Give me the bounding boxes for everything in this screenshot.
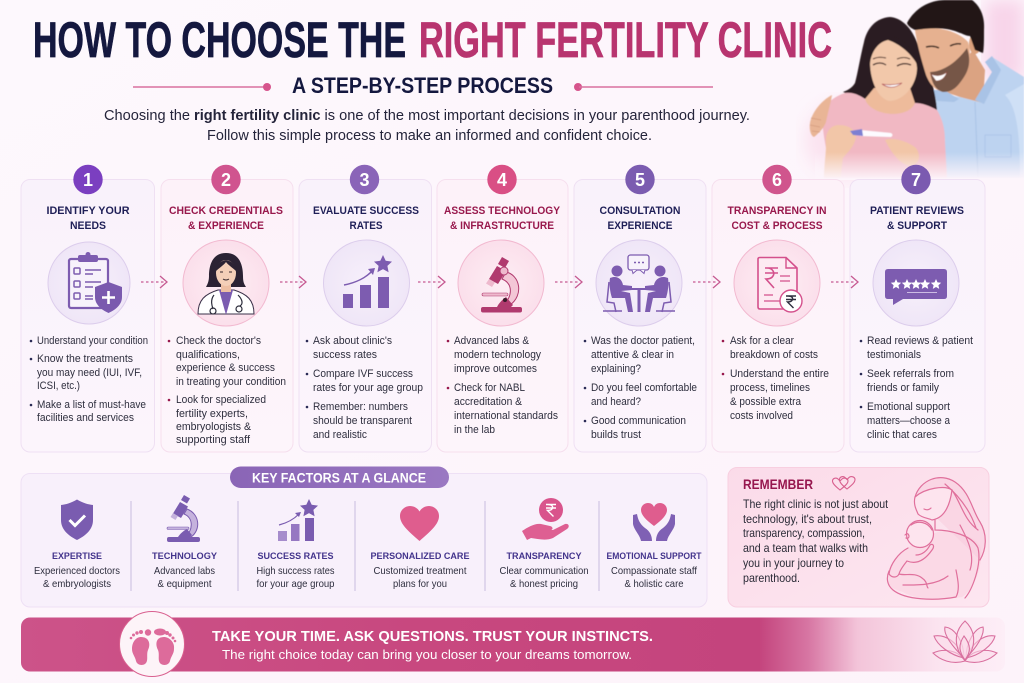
factor: personalized care: PERSONALIZED CARE xyxy=(370,551,470,562)
arrow 1 to 2 xyxy=(141,276,167,288)
panel: step 5 consultation experience xyxy=(574,165,706,452)
remember heading: REMEMBER xyxy=(743,476,813,492)
factor: emotional support xyxy=(606,503,702,590)
heading step 6 xyxy=(728,205,827,232)
step number 2 xyxy=(211,165,241,194)
bullets step 7: Read reviews & patient xyxy=(867,335,973,347)
bullets step 3: Ask about clinic's xyxy=(313,335,392,347)
remember text: technology, it's about trust, xyxy=(743,512,872,526)
bullets step 4: Check for NABL xyxy=(454,382,525,394)
bullets step 5: Good communication xyxy=(591,415,686,427)
icon: baby footprints xyxy=(120,612,184,676)
step number 3: 3 xyxy=(359,170,370,190)
factor: expertise: & embryologists xyxy=(43,578,111,590)
bullets step 1: ICSI, etc.) xyxy=(37,380,80,392)
woman face xyxy=(870,40,917,101)
heading step 5: CONSULTATION xyxy=(600,205,681,217)
heading step 6: TRANSPARENCY IN xyxy=(728,205,827,217)
bullets step 1: facilities and services xyxy=(37,412,134,424)
remember text: parenthood. xyxy=(743,571,800,585)
bullets step 7: friends or family xyxy=(867,382,939,394)
step number 6 xyxy=(762,165,792,194)
bullets step 1: Know the treatments xyxy=(37,353,133,365)
step number 3 xyxy=(350,165,379,194)
bullets step 3: and realistic xyxy=(313,429,367,441)
factor: transparency: & honest pricing xyxy=(510,578,578,590)
title: HOW TO CHOOSE THE xyxy=(33,12,406,68)
bullets step 7: testimonials xyxy=(867,349,921,361)
heading step 7: & SUPPORT xyxy=(887,220,947,232)
arrow 5 to 6 xyxy=(693,276,720,288)
factor: success rates: High success rates xyxy=(256,565,334,577)
factor: technology xyxy=(152,495,218,590)
bullets step 4: modern technology xyxy=(454,349,541,361)
icon: doctor xyxy=(183,240,269,326)
heading step 1 xyxy=(46,205,130,232)
factor: success rates: for your age group xyxy=(256,578,335,590)
factor: expertise: EXPERTISE xyxy=(52,551,102,562)
panel: key factors at a glance xyxy=(21,466,707,607)
step number 1 xyxy=(73,165,103,194)
panel: step 1 identify your needs xyxy=(21,165,154,452)
icon: microscope xyxy=(458,240,544,326)
remember text: you in your journey to xyxy=(743,556,844,570)
subtitle with ornament lines xyxy=(133,73,713,98)
bullets step 7: Emotional support xyxy=(867,401,950,413)
bullets step 7: matters—choose a xyxy=(867,415,951,427)
icon: rising bar chart with star xyxy=(324,240,410,326)
banner headline: TAKE YOUR TIME. ASK QUESTIONS. TRUST YOUR INSTINCTS. xyxy=(212,628,653,645)
step number 7: 7 xyxy=(911,170,921,190)
heading pill: KEY FACTORS AT A GLANCE xyxy=(252,470,426,486)
bullets step 6 xyxy=(722,335,829,422)
remember text xyxy=(743,497,889,585)
bullets step 5 xyxy=(584,335,697,441)
bullets step 4: accreditation & xyxy=(454,396,523,408)
icon: lotus xyxy=(933,621,997,662)
bullets step 2: qualifications, xyxy=(176,349,240,361)
arrow 3 to 4 xyxy=(418,276,445,288)
bullets step 4: improve outcomes xyxy=(454,363,537,375)
heading step 4 xyxy=(444,205,561,232)
bullets step 2: experience & success xyxy=(176,362,275,374)
factor: personalized care: plans for you xyxy=(393,578,447,590)
factor: emotional support: EMOTIONAL SUPPORT xyxy=(606,551,702,562)
bullets step 5: attentive & clear in xyxy=(591,349,674,361)
illustration: mother holding baby xyxy=(887,478,985,599)
woman hands xyxy=(824,125,856,178)
bullets step 2: in treating your condition xyxy=(176,376,286,388)
heading step 4: ASSESS TECHNOLOGY xyxy=(444,205,561,217)
intro text xyxy=(104,107,750,144)
heading step 6: COST & PROCESS xyxy=(732,220,822,232)
icon: two people at a table with speech bubble xyxy=(596,240,682,326)
factor: expertise xyxy=(34,500,120,590)
factor: transparency: TRANSPARENCY xyxy=(506,551,582,562)
heading step 5: EXPERIENCE xyxy=(608,220,672,232)
woman hair back xyxy=(843,17,937,110)
subtitle with ornament lines: A STEP-BY-STEP PROCESS xyxy=(292,73,553,98)
panel: step 4 assess technology xyxy=(437,165,568,452)
man hair xyxy=(907,0,984,53)
bullets step 4 xyxy=(447,335,558,436)
intro text: Choosing the right fertility clinic is one of the most important decisions in your parenthood journey. xyxy=(104,107,750,124)
bullets step 2: embryologists & xyxy=(176,421,252,433)
bullets step 6: process, timelines xyxy=(730,382,810,394)
title xyxy=(33,12,832,68)
intro text: Follow this simple process to make an informed and confident choice. xyxy=(207,127,652,144)
remember text: and a team that walks with xyxy=(743,541,868,555)
heading step 7 xyxy=(870,205,964,232)
bullets step 5: explaining? xyxy=(591,363,641,375)
sweater xyxy=(822,93,947,178)
man hand on shoulder xyxy=(810,95,832,137)
arrow 4 to 5 xyxy=(555,276,582,288)
bullets step 7: clinic that cares xyxy=(867,429,937,441)
footer banner xyxy=(21,612,1005,676)
factor: technology: Advanced labs xyxy=(154,565,215,577)
bullets step 1: Make a list of must-have xyxy=(37,399,146,411)
factor: emotional support: Compassionate staff xyxy=(611,565,697,577)
bullets step 4: Advanced labs & xyxy=(454,335,530,347)
bullets step 4: in the lab xyxy=(454,424,495,436)
heading step 2 xyxy=(169,205,283,232)
bullets step 5: builds trust xyxy=(591,429,641,441)
factor: success rates: SUCCESS RATES xyxy=(258,551,334,562)
panel: step 6 transparency in cost xyxy=(712,165,844,452)
bullets step 1: you may need (IUI, IVF, xyxy=(37,367,142,379)
step number 6: 6 xyxy=(772,170,782,190)
man shirt and neck are drawn first so the woman overlaps them xyxy=(933,57,1024,178)
remember text: transparency, compassion, xyxy=(743,526,865,540)
bullets step 7 xyxy=(860,335,973,441)
step number 5 xyxy=(625,165,655,194)
arrow 6 to 7 xyxy=(831,276,858,288)
pregnancy test xyxy=(860,130,892,137)
heading step 2: CHECK CREDENTIALS xyxy=(169,205,283,217)
bullets step 3: success rates xyxy=(313,349,377,361)
icon: review bubble with five stars xyxy=(873,240,959,326)
heading step 3: RATES xyxy=(350,220,382,232)
step number 7 xyxy=(901,165,931,194)
arrow 2 to 3 xyxy=(280,276,306,288)
heading step 4: & INFRASTRUCTURE xyxy=(450,220,554,232)
photo: couple holding a pregnancy test xyxy=(805,0,1024,180)
banner subline: The right choice today can bring you closer to your dreams tomorrow. xyxy=(222,648,632,662)
bullets step 6: & possible extra xyxy=(730,396,802,408)
step number 2: 2 xyxy=(221,170,231,190)
icon: double hearts xyxy=(832,477,855,490)
bullets step 3 xyxy=(306,335,423,441)
bullets step 3: Compare IVF success xyxy=(313,368,413,380)
step number 1: 1 xyxy=(83,170,93,190)
bullets step 3: should be transparent xyxy=(313,415,412,427)
bullets step 6: breakdown of costs xyxy=(730,349,818,361)
bullets step 6: Understand the entire xyxy=(730,368,829,380)
bullets step 2: Look for specialized xyxy=(176,394,266,406)
bullets step 5: and heard? xyxy=(591,396,641,408)
bullets step 1: Understand your condition xyxy=(37,335,148,347)
step number 5: 5 xyxy=(635,170,645,190)
factor: transparency xyxy=(500,498,589,590)
bullets step 2: supporting staff xyxy=(176,434,251,446)
factor: personalized care: Customized treatment xyxy=(374,565,467,577)
bullets step 2 xyxy=(168,335,286,446)
panel: step 2 check credentials xyxy=(161,165,293,452)
title: RIGHT FERTILITY CLINIC xyxy=(419,12,832,68)
heading step 3: EVALUATE SUCCESS xyxy=(313,205,419,217)
heading step 1: NEEDS xyxy=(70,220,106,232)
bullets step 2: fertility experts, xyxy=(176,408,248,420)
panel: remember callout xyxy=(728,468,989,607)
bullets step 4: international standards xyxy=(454,410,558,422)
man face xyxy=(915,28,970,92)
bullets step 5: Do you feel comfortable xyxy=(591,382,697,394)
heading step 5 xyxy=(600,205,681,232)
step number 4: 4 xyxy=(497,170,507,190)
bullets step 1 xyxy=(30,335,148,424)
bullets step 6: costs involved xyxy=(730,410,793,422)
bullets step 3: rates for your age group xyxy=(313,382,423,394)
bullets step 5: Was the doctor patient, xyxy=(591,335,695,347)
icon: bill document with rupee xyxy=(734,240,820,326)
factor: personalized care xyxy=(370,506,470,590)
heading step 3 xyxy=(313,205,419,232)
factor: expertise: Experienced doctors xyxy=(34,565,120,577)
panel: step 7 patient reviews xyxy=(850,165,985,452)
bullets step 3: Remember: numbers xyxy=(313,401,408,413)
heading step 7: PATIENT REVIEWS xyxy=(870,205,964,217)
factor: technology: TECHNOLOGY xyxy=(152,551,218,562)
factor: transparency: Clear communication xyxy=(500,565,589,577)
bullets step 7: Seek referrals from xyxy=(867,368,954,380)
heading step 2: & EXPERIENCE xyxy=(188,220,264,232)
heading pill xyxy=(230,466,449,488)
heading step 1: IDENTIFY YOUR xyxy=(46,205,130,217)
bullets step 2: Check the doctor's xyxy=(176,335,261,347)
factor: technology: & equipment xyxy=(158,578,212,590)
factor: emotional support: & holistic care xyxy=(624,578,684,590)
remember text: The right clinic is not just about xyxy=(743,497,889,511)
panel: step 3 evaluate success rates xyxy=(299,165,432,452)
icon: clipboard with shield xyxy=(48,242,130,324)
bullets step 6: Ask for a clear xyxy=(730,335,794,347)
factor: success rates xyxy=(256,499,335,590)
step number 4 xyxy=(487,165,517,194)
